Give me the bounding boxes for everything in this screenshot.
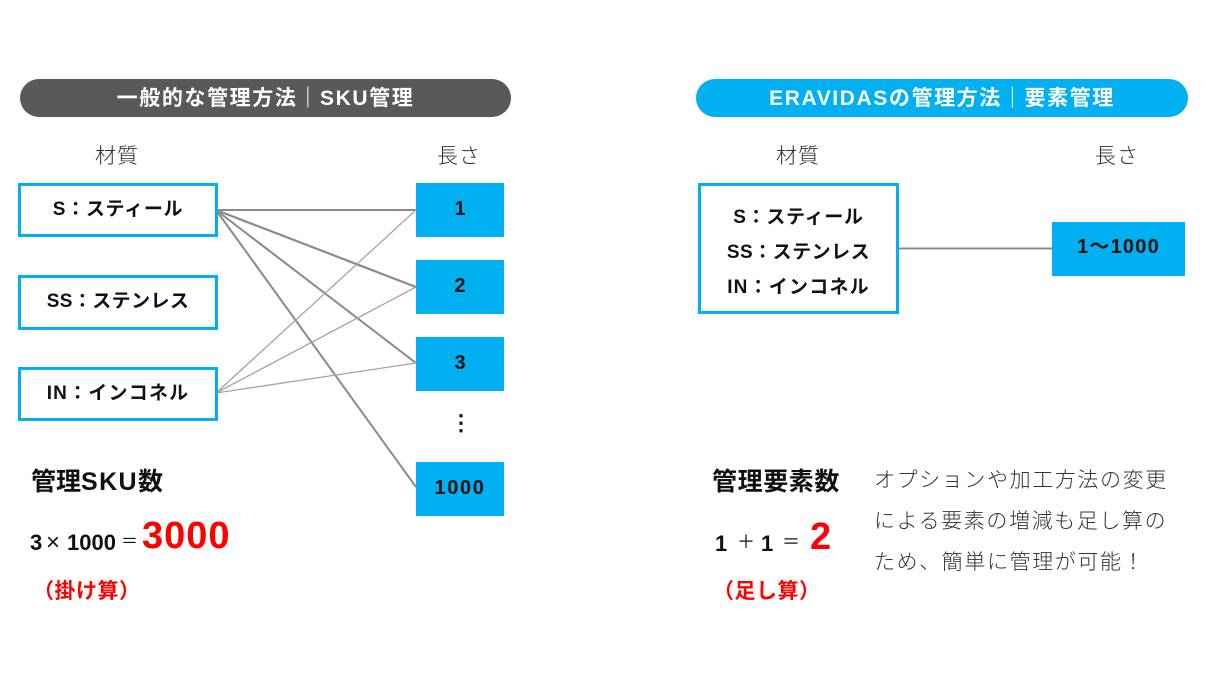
merged material box: S：スティール (733, 207, 864, 228)
right column label: length: 長さ (1095, 145, 1139, 168)
material box: SS: SS：ステンレス (47, 291, 189, 312)
merged material box: SS：ステンレス (727, 242, 870, 263)
material box: SS (18, 275, 218, 330)
element formula: ＝ (782, 532, 800, 552)
length box: 3 (416, 337, 504, 391)
element formula: 2 (810, 516, 831, 558)
material box: IN: IN：インコネル (47, 383, 189, 404)
material box: S: S：スティール (53, 199, 183, 220)
length box: 3: 3 (454, 352, 466, 374)
merged material box (698, 183, 899, 314)
multiplication note: （掛け算） (33, 580, 140, 603)
header: general method: 一般的な管理方法｜SKU管理 (117, 87, 414, 110)
element formula: 1 (715, 531, 727, 556)
header: ERAVIDAS method (696, 79, 1188, 117)
element formula (715, 516, 831, 558)
left column label: material: 材質 (95, 145, 139, 168)
SKU formula: 3000 (142, 515, 231, 557)
SKU count heading: 管理SKU数 (31, 468, 163, 496)
element formula: 1 (761, 531, 773, 556)
merged length box: 1～1000 (1077, 236, 1160, 258)
header: ERAVIDAS method: ERAVIDASの管理方法｜要素管理 (769, 87, 1115, 110)
SKU formula (30, 515, 231, 557)
material box: S (18, 183, 218, 237)
header: general method (20, 79, 511, 117)
material box: IN (18, 367, 218, 421)
element count heading: 管理要素数 (712, 468, 840, 496)
merged material box: IN：インコネル (727, 277, 870, 298)
left column label: length: 長さ (437, 145, 481, 168)
length box: 1 (416, 183, 504, 237)
merged length box (1052, 222, 1185, 276)
SKU formula: ＝ (121, 532, 138, 551)
vertical ellipsis: ⋮ (450, 410, 472, 435)
addition note: （足し算） (713, 580, 820, 603)
explanation text (874, 469, 1168, 574)
SKU formula: × (46, 529, 60, 556)
explanation text: ため、簡単に管理が可能！ (874, 551, 1145, 574)
length box: 1: 1 (454, 198, 466, 220)
explanation text: オプションや加工方法の変更 (874, 469, 1168, 492)
length box: 2 (416, 260, 504, 314)
SKU formula: 3 (30, 530, 42, 555)
right column label: material: 材質 (776, 145, 820, 168)
SKU formula: 1000 (67, 530, 116, 555)
length box: 1000 (416, 462, 504, 516)
element formula: ＋ (737, 532, 755, 552)
length box: 1000: 1000 (435, 477, 485, 499)
explanation text: による要素の増減も足し算の (874, 510, 1167, 533)
length box: 2: 2 (454, 275, 466, 297)
